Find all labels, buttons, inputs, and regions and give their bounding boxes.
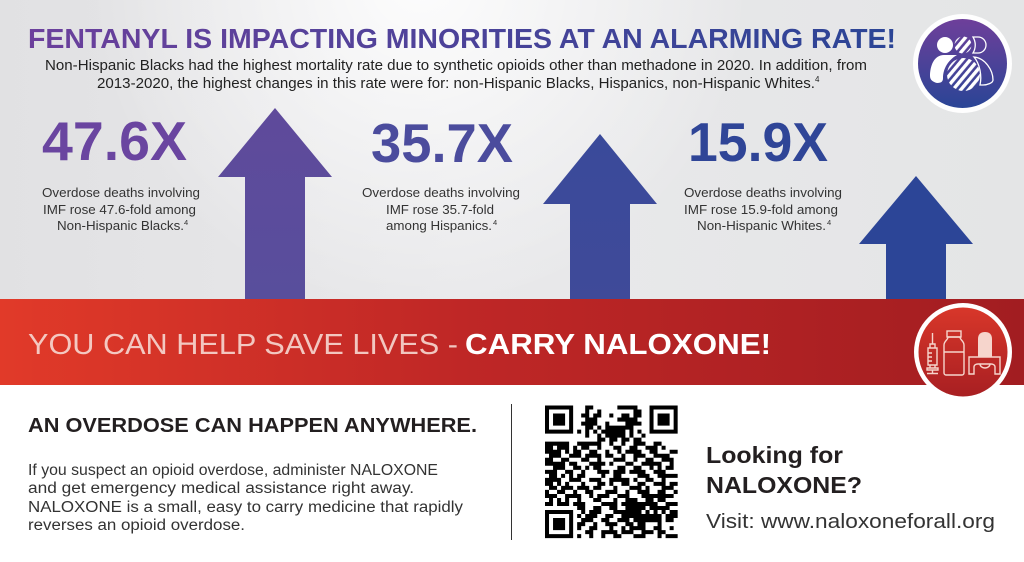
stat: 15.9X — [684, 111, 842, 233]
heading: an overdose can happen anywhere: AN OVERDOSE CAN HAPPEN ANYWHERE. — [28, 415, 477, 437]
text: website link: Visit: www.naloxoneforall.org — [706, 510, 995, 533]
text: 47.6X description — [42, 185, 200, 233]
text: overdose instructions: NALOXONE is a small, easy to carry medicine that rapidly — [28, 499, 463, 516]
text: 35.7X description: among Hispanics. — [386, 218, 492, 233]
text: looking for naloxone: NALOXONE? — [706, 472, 862, 498]
panel: red call-to-action band — [0, 299, 1024, 385]
text: 47.6X description: IMF rose 47.6-fold among — [43, 202, 196, 217]
intro text: 2013-2020, the highest changes in this rate were for: non-Hispanic Blacks, Hispanics, non-Hispanic Whites. — [97, 76, 815, 92]
stat: 35.7X: 35.7X — [371, 112, 513, 174]
text: overdose instructions: reverses an opioid overdose. — [28, 517, 245, 534]
text: 15.9X description: Overdose deaths involving — [684, 185, 842, 200]
title: FENTANYL IS IMPACTING MINORITIES AT AN ALARMING RATE! — [28, 23, 896, 54]
text: 35.7X description: IMF rose 35.7-fold — [386, 202, 494, 217]
arrow: Non-Hispanic Blacks — [218, 108, 332, 300]
text: 35.7X description: 4 — [493, 218, 497, 227]
QR code — [545, 406, 678, 538]
text: 15.9X description: IMF rose 15.9-fold among — [684, 202, 838, 217]
text: overdose instructions: If you suspect an opioid overdose, administer NALOXONE — [28, 462, 438, 479]
text: looking for naloxone: Looking for — [706, 442, 843, 468]
text: 15.9X description: 4 — [827, 218, 831, 227]
intro text — [45, 58, 867, 92]
icon: people with stripes badge — [913, 14, 1012, 113]
arrow: Non-Hispanic Whites — [859, 176, 973, 300]
panel: grey top background — [0, 0, 1024, 300]
panel: red call-to-action band: CARRY NALOXONE! — [465, 329, 771, 361]
icon: syringe, vial and nasal spray badge — [914, 303, 1012, 401]
text: 47.6X description: Non-Hispanic Blacks. — [57, 218, 184, 233]
stat: 47.6X: 47.6X — [42, 110, 187, 172]
arrow: Hispanics — [543, 134, 657, 300]
text: 35.7X description — [362, 185, 520, 233]
stat: 15.9X: 15.9X — [688, 111, 828, 173]
stat: 35.7X — [362, 112, 520, 233]
text: overdose instructions — [28, 462, 463, 534]
text: 47.6X description: Overdose deaths involving — [42, 185, 200, 200]
text: 35.7X description: Overdose deaths involving — [362, 185, 520, 200]
intro text: 4 — [815, 75, 820, 84]
panel: red call-to-action band: YOU CAN HELP SAVE LIVES - — [28, 329, 458, 361]
text: looking for naloxone — [706, 442, 995, 533]
text: 15.9X description — [684, 185, 842, 233]
text: 15.9X description: Non-Hispanic Whites. — [697, 218, 826, 233]
text: 47.6X description: 4 — [184, 218, 188, 227]
stat: 47.6X — [42, 110, 200, 233]
text: overdose instructions: and get emergency medical assistance right away. — [28, 480, 414, 497]
intro text: Non-Hispanic Blacks had the highest mortality rate due to synthetic opioids other than methadone in 2020. In addition, from — [45, 58, 867, 74]
